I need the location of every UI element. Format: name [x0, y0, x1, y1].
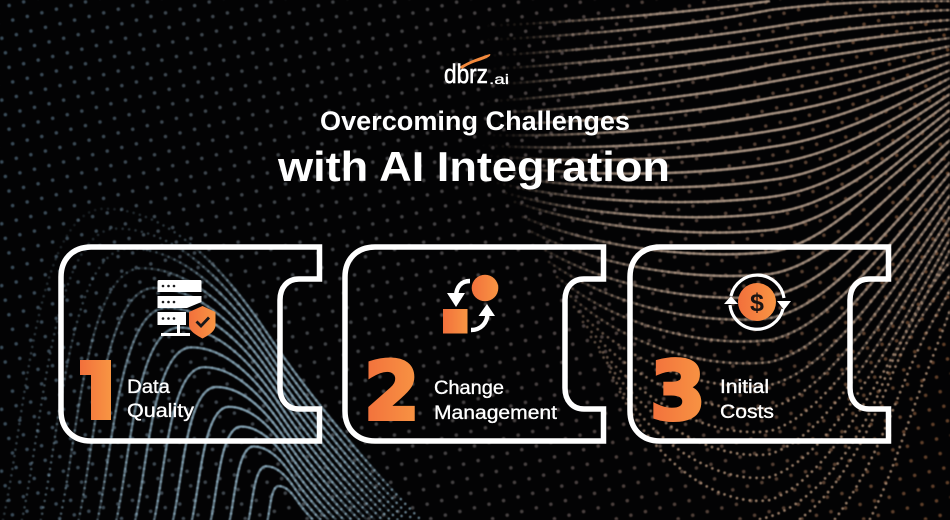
title	[277, 106, 670, 190]
icon: dollar with cycle arrows	[724, 275, 791, 329]
icon: shapes with swap arrows	[443, 275, 498, 334]
label: Change Management: Change	[434, 377, 504, 399]
panel: Initial Costs	[630, 247, 888, 441]
number 2: 2	[364, 345, 420, 438]
number 3: 3	[650, 345, 706, 438]
icon: dollar with cycle arrows: $	[750, 289, 764, 317]
icon: server with shield	[158, 280, 216, 338]
label: Initial Costs	[720, 376, 774, 423]
label: Data Quality	[127, 376, 194, 422]
label: Initial Costs: Costs	[720, 401, 774, 423]
title: with AI Integration	[277, 143, 670, 190]
label: Change Management	[434, 377, 558, 424]
panel: Data Quality	[61, 247, 320, 442]
label: Data Quality: Data	[127, 376, 170, 398]
title: Overcoming Challenges	[320, 106, 630, 136]
label: Data Quality: Quality	[127, 400, 194, 422]
panel: Change Management	[345, 247, 604, 441]
logo: dbrz.ai	[444, 54, 509, 89]
label: Initial Costs: Initial	[720, 376, 769, 398]
logo: dbrz.ai: .ai	[489, 71, 509, 87]
number 1: 1	[62, 337, 125, 442]
logo: dbrz.ai: dbrz	[444, 59, 488, 89]
label: Change Management: Management	[434, 402, 558, 424]
